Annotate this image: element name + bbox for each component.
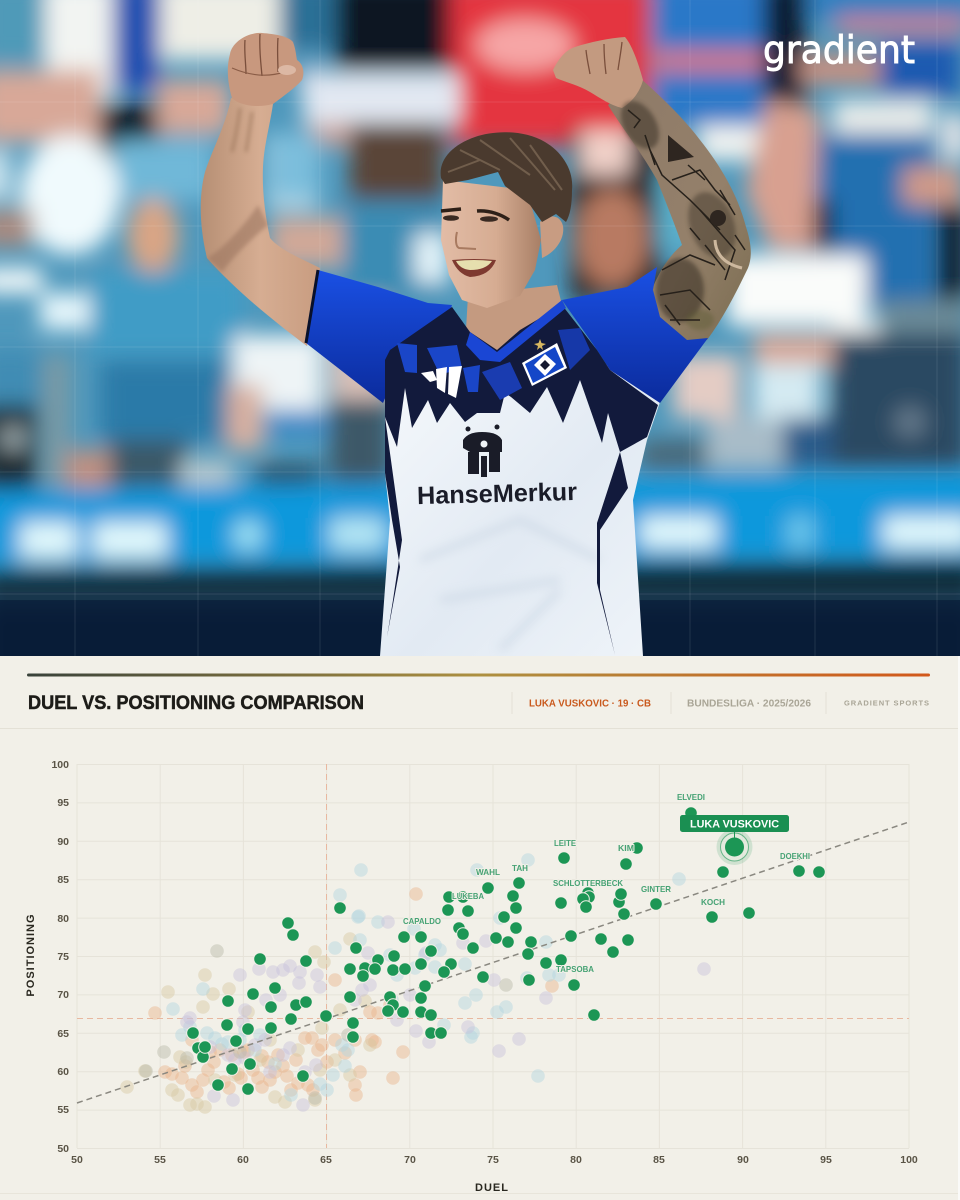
other players: pale tan dots <box>120 932 377 1114</box>
player name labels <box>403 792 810 974</box>
jersey white torso <box>380 360 660 656</box>
y axis tick labels: 85 <box>57 874 69 886</box>
y axis tick labels: 60 <box>57 1066 69 1078</box>
regression trend line <box>77 822 909 1103</box>
x axis tick labels: 100 <box>900 1154 918 1166</box>
x axis tick labels: 70 <box>404 1154 416 1166</box>
jersey sleeves <box>306 270 452 403</box>
x axis tick labels <box>71 1154 918 1166</box>
y axis tick labels: 55 <box>57 1104 69 1116</box>
header meta: league: BUNDESLIGA · 2025/2026 <box>687 698 811 710</box>
player right tattooed arm and fist <box>553 37 751 342</box>
y axis tick labels: 70 <box>57 989 69 1001</box>
player name labels: GINTER <box>641 884 671 894</box>
x axis tick labels: 50 <box>71 1154 83 1166</box>
icon: star above crest <box>534 339 546 350</box>
x axis tick labels: 95 <box>820 1154 832 1166</box>
y axis tick labels: 80 <box>57 913 69 925</box>
panel: chart card <box>0 656 960 1200</box>
y axis tick labels: 100 <box>51 759 69 771</box>
player name labels: SCHLOTTERBECK <box>553 878 624 888</box>
header meta: player: LUKA VUSKOVIC · 19 · CB <box>529 698 651 710</box>
header gradient rule <box>27 674 930 676</box>
x axis tick labels: 60 <box>237 1154 249 1166</box>
jersey dark yoke with jagged edge <box>385 305 658 452</box>
y axis tick labels: 50 <box>57 1143 69 1155</box>
player name labels: KIM <box>618 843 634 853</box>
y axis tick labels: 65 <box>57 1028 69 1040</box>
x axis tick labels: 80 <box>570 1154 582 1166</box>
player name labels: TAPSOBA <box>556 964 594 974</box>
player name labels: DOEKHI <box>780 851 810 861</box>
player left arm and fist <box>201 33 320 346</box>
y axis tick labels: 90 <box>57 836 69 848</box>
y axis title: POSITIONING <box>25 913 37 997</box>
x axis tick labels: 85 <box>653 1154 665 1166</box>
icon: three stripes <box>421 366 462 398</box>
player neck <box>466 285 562 352</box>
player head: face and hair <box>441 132 572 308</box>
other players: pale blue dots <box>166 853 686 1102</box>
other players: pale orange dots <box>148 887 559 1102</box>
player name labels: ELVEDI <box>677 792 705 802</box>
photo: celebrating player <box>201 33 751 656</box>
other players: pale purple dots <box>180 915 711 1112</box>
player name labels: LEITE <box>554 838 576 848</box>
icon: club crest <box>522 343 567 386</box>
sponsor wordmark: HanseMerkur <box>417 478 578 510</box>
highlighted player marker: Luka Vuskovic <box>716 829 752 865</box>
callout: Luka Vuskovic <box>680 815 789 832</box>
scatter chart: duel vs positioning <box>25 759 918 1194</box>
y axis tick labels <box>51 759 69 1155</box>
heading: DUEL VS. POSITIONING COMPARISON <box>28 692 364 714</box>
highlighted players: green dots <box>187 807 825 1095</box>
x axis tick labels: 65 <box>320 1154 332 1166</box>
player name labels: KOCH <box>701 897 725 907</box>
y axis tick labels: 75 <box>57 951 69 963</box>
player name labels: LUKEBA <box>452 891 484 901</box>
jersey dark side panels <box>385 417 402 637</box>
player name labels: TAH <box>512 863 528 873</box>
x axis tick labels: 75 <box>487 1154 499 1166</box>
x axis title: DUEL <box>475 1182 509 1194</box>
player name labels: CAPALDO <box>403 916 441 926</box>
player jersey <box>306 267 708 656</box>
photo: blurred stadium crowd background <box>0 0 960 680</box>
x axis tick labels: 90 <box>737 1154 749 1166</box>
player name labels: WAHL <box>476 867 500 877</box>
x axis tick labels: 55 <box>154 1154 166 1166</box>
y axis tick labels: 95 <box>57 797 69 809</box>
logo: gradient wordmark: gradient <box>763 28 915 72</box>
icon: sponsor symbol <box>463 424 502 477</box>
other players: pale grey dots <box>139 944 513 1105</box>
median reference lines <box>77 764 909 1148</box>
header meta: source: GRADIENT SPORTS <box>844 698 929 708</box>
callout: Luka Vuskovic: LUKA VUSKOVIC <box>690 818 779 830</box>
